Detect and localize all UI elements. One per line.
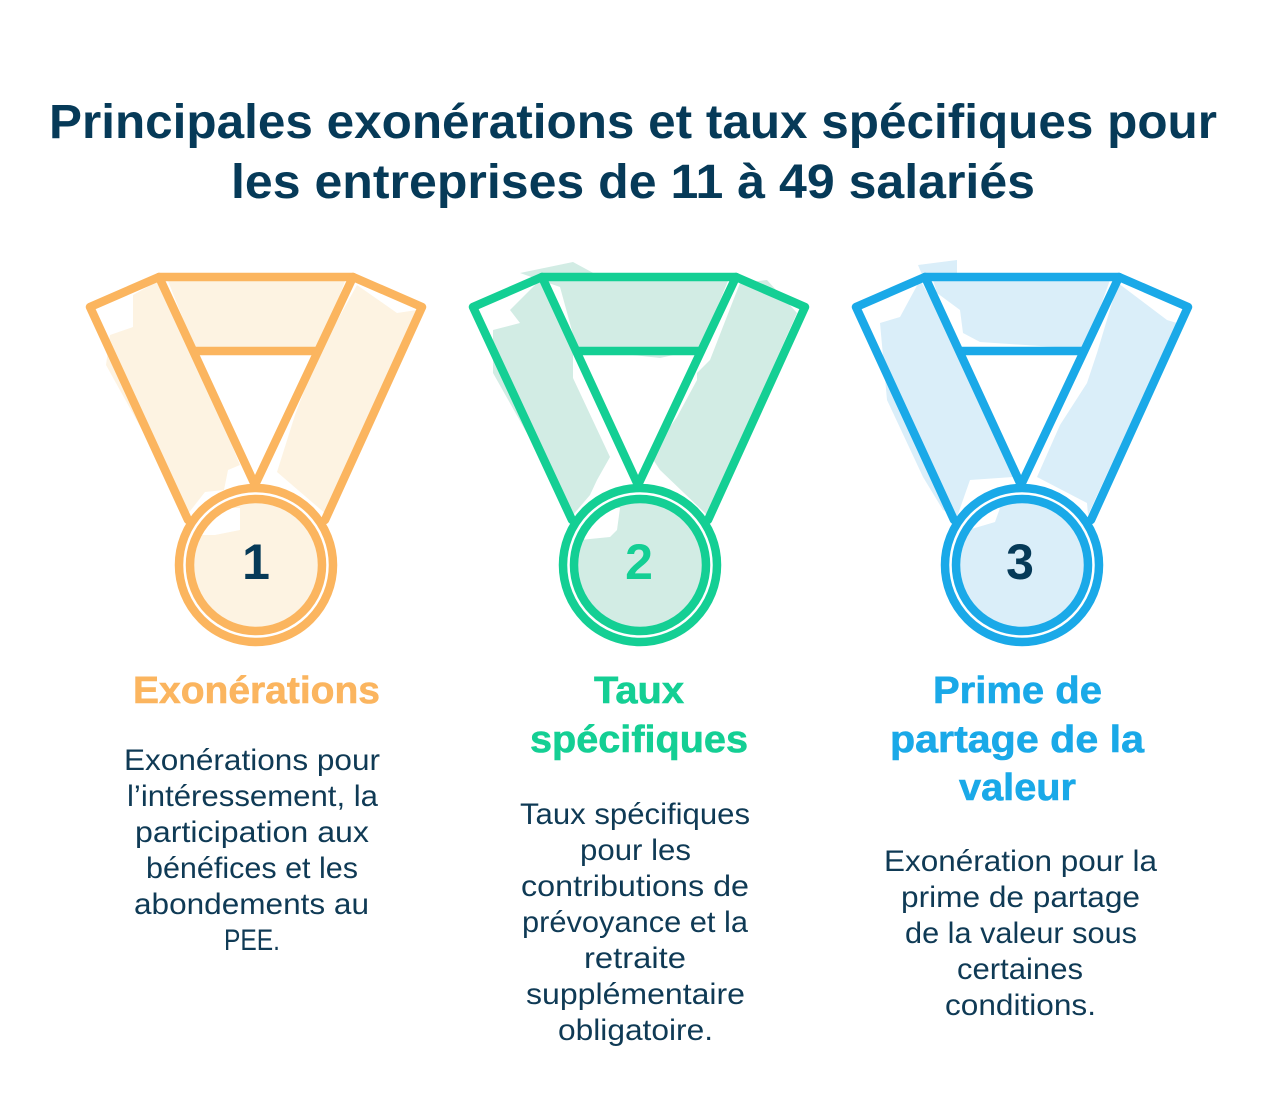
text: description exonérations: participation aux <box>135 816 369 849</box>
heading: Prime de partage de la valeur: partage de la <box>890 719 1145 761</box>
text: description taux spécifiques: obligatoire. <box>558 1014 713 1047</box>
text: description taux spécifiques: contributions de <box>521 870 749 903</box>
text: description taux spécifiques: supplémentaire <box>526 978 745 1011</box>
heading: Taux spécifiques: Taux <box>594 670 684 712</box>
heading: Taux spécifiques: spécifiques <box>530 719 748 761</box>
icon: blue medal 3 <box>856 260 1188 643</box>
text: description taux spécifiques: prévoyance et la <box>522 906 748 939</box>
icon: green medal 2 <box>473 262 805 643</box>
heading: Prime de partage de la valeur: Prime de <box>933 670 1102 712</box>
text: description exonérations: PEE. <box>224 924 280 957</box>
icon: green medal 2: 2 <box>625 534 653 590</box>
title: Principales exonérations et taux spécifiques pour <box>49 96 1217 149</box>
text: description prime de partage: certaines <box>957 953 1083 986</box>
title <box>49 96 1217 209</box>
title: les entreprises de 11 à 49 salariés <box>231 156 1035 209</box>
text: description prime de partage: Exonération pour la <box>884 845 1157 878</box>
text: description prime de partage: prime de partage <box>901 881 1140 914</box>
text: description taux spécifiques: retraite <box>584 942 686 975</box>
text: description exonérations: Exonérations pour <box>124 744 380 777</box>
panel: exonérations <box>90 277 422 957</box>
heading: Prime de partage de la valeur: valeur <box>959 767 1076 809</box>
text: description exonérations: bénéfices et les <box>146 852 358 885</box>
text: description taux spécifiques: Taux spécifiques <box>520 798 750 831</box>
text: description taux spécifiques <box>520 798 750 1047</box>
text: description prime de partage: de la valeur sous <box>905 917 1137 950</box>
text: description exonérations: abondements au <box>134 888 369 921</box>
text: description taux spécifiques: pour les <box>580 834 691 867</box>
text: description prime de partage: conditions. <box>945 989 1096 1022</box>
panel: prime de partage de la valeur <box>856 260 1188 1022</box>
panel: taux spécifiques <box>473 262 805 1047</box>
icon: orange medal 1 <box>90 277 422 643</box>
text: description exonérations <box>124 744 380 957</box>
heading: Taux spécifiques <box>530 670 748 761</box>
text: description prime de partage <box>884 845 1157 1022</box>
text: description exonérations: l’intéressement, la <box>127 780 378 813</box>
icon: blue medal 3: 3 <box>1006 534 1034 590</box>
icon: orange medal 1: 1 <box>242 534 270 590</box>
heading: Exonérations: Exonérations <box>133 670 380 712</box>
heading: Prime de partage de la valeur <box>890 670 1145 809</box>
